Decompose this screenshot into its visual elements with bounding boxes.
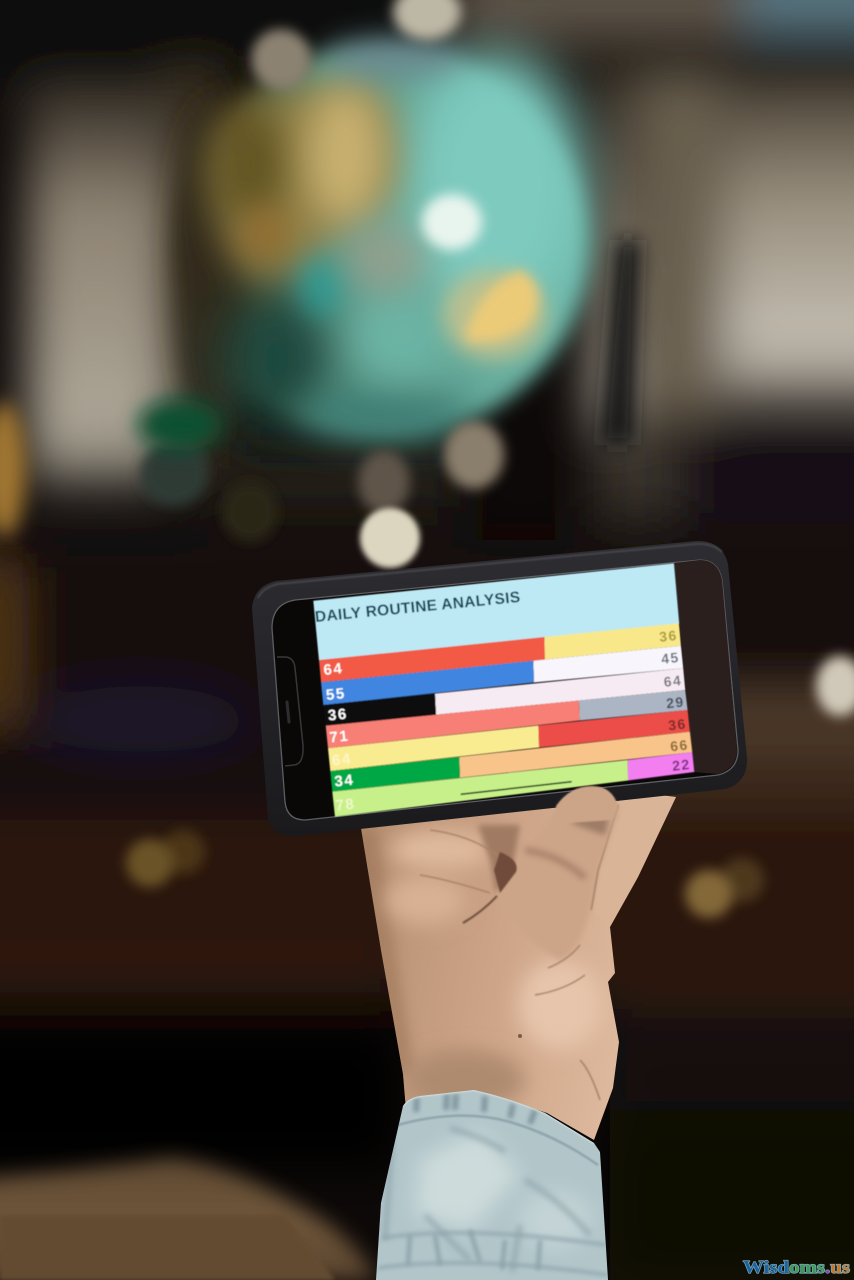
row 5 bars: 36	[667, 716, 687, 733]
phone	[252, 541, 747, 836]
continent body	[213, 81, 398, 283]
bokeh lights	[0, 0, 854, 918]
thumbnail	[571, 820, 610, 836]
watermark: Wisd oms .us	[743, 1257, 850, 1277]
row 4 bars	[326, 690, 688, 748]
globe top tint	[325, 38, 465, 78]
sleeve bottom ridges	[378, 1233, 608, 1275]
row 1 bars	[319, 623, 681, 682]
wrist creases	[535, 945, 600, 1100]
row 3 bars: 64	[663, 672, 683, 690]
second finger	[610, 796, 676, 927]
sleeve light patch right	[520, 1192, 590, 1248]
row 5 bars: 64	[331, 751, 353, 769]
hand	[350, 785, 676, 1140]
chart title: DAILY ROUTINE ANALYSIS	[314, 589, 521, 626]
globe upper right ocean	[405, 50, 585, 320]
ocean teal	[300, 255, 344, 315]
row 1 bars: 36	[658, 627, 678, 645]
continent tan	[307, 87, 383, 223]
thumb tip over phone edge	[556, 786, 618, 824]
foreground tan surface bottom left	[0, 1158, 378, 1280]
row 3 bars	[323, 668, 685, 726]
thumb	[546, 806, 618, 960]
row 7 bars: 22	[671, 756, 691, 774]
thumb shade band	[525, 850, 585, 878]
wrist lower shade	[405, 1050, 525, 1110]
screen header panel	[313, 563, 679, 660]
right bezel tint	[674, 560, 737, 774]
globe window glare	[422, 194, 482, 250]
globe left dark crescent	[174, 100, 250, 430]
row 5 bars	[328, 710, 690, 771]
row 4 bars: 29	[665, 694, 685, 711]
palm crease line	[463, 896, 497, 923]
tan surface base fill	[0, 1215, 335, 1280]
home indicator	[461, 782, 572, 794]
globe highlights	[422, 194, 547, 360]
palm edge shadow	[362, 830, 414, 1074]
row 2 bars: 45	[660, 649, 680, 667]
case top highlight	[258, 544, 722, 598]
row 3 bars: 36	[327, 706, 349, 724]
curled finger crease	[420, 830, 497, 893]
sleeve rim	[403, 1090, 594, 1143]
palm dark crease	[494, 852, 517, 893]
phone screen	[313, 563, 694, 817]
row 7 bars: 78	[335, 796, 356, 814]
continent lower right halo	[443, 270, 547, 360]
row 7 bars	[332, 752, 694, 817]
row 2 bars	[321, 646, 683, 705]
second finger gap shade	[591, 805, 618, 910]
row 6 bars	[330, 732, 692, 792]
palm mid	[385, 875, 465, 925]
knuckle mark	[518, 1034, 522, 1038]
ocean bottom	[295, 387, 475, 443]
speaker slot	[287, 702, 289, 722]
ocean mid	[352, 290, 448, 380]
sleeve top seam	[398, 1116, 598, 1165]
sleeve top ridges	[416, 1094, 535, 1124]
globe stand	[600, 240, 640, 445]
row 1 bars: 64	[323, 660, 344, 679]
continent olive	[216, 105, 288, 225]
denim sleeve cuff	[376, 1090, 608, 1280]
sleeve fold shade	[385, 1128, 590, 1272]
row 6 bars: 66	[669, 737, 689, 754]
continent orange edge	[241, 205, 289, 265]
notch outline	[277, 657, 303, 766]
sleeve light patches	[415, 1130, 520, 1230]
row 4 bars: 71	[329, 728, 350, 746]
phone case	[252, 541, 747, 836]
curled fingers highlight	[390, 830, 490, 870]
ocean lower dark	[223, 288, 333, 432]
curled finger shadow	[478, 825, 520, 895]
phone bezel	[272, 560, 738, 820]
globe	[174, 38, 591, 443]
sleeve bottom cross ridges	[408, 1230, 540, 1270]
thumb tip light	[586, 790, 612, 808]
row 6 bars: 34	[334, 772, 355, 790]
continent lower right	[465, 270, 538, 342]
row 2 bars: 55	[325, 685, 347, 704]
wrist highlight	[518, 960, 602, 1050]
grey centre	[345, 224, 425, 292]
